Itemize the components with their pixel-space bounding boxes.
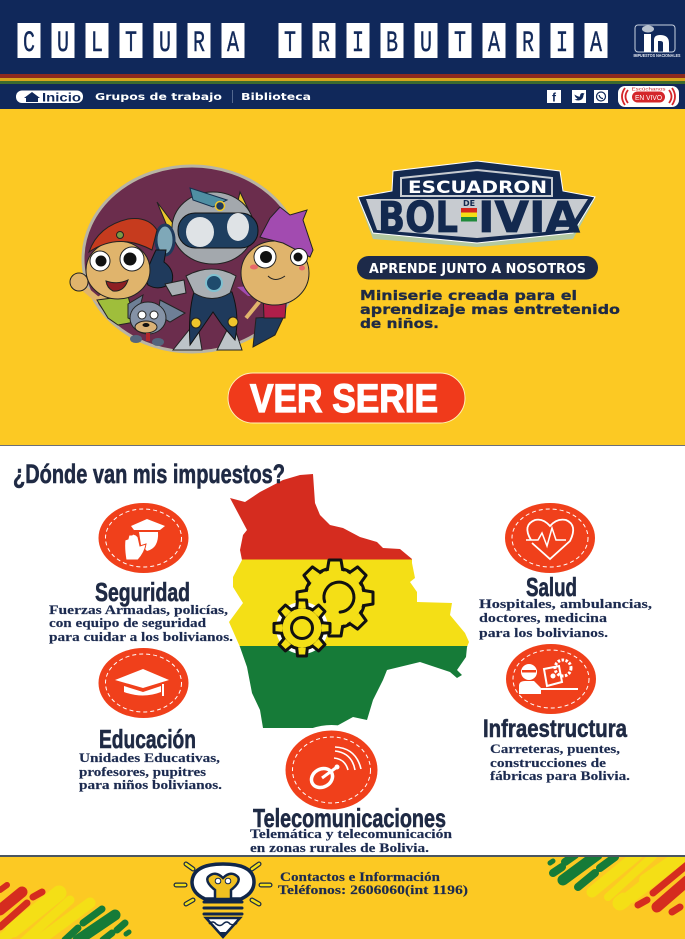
map of Bolivia [229,474,469,728]
title: Cultura Tributaria [18,23,608,61]
icon: whatsapp [594,90,608,103]
label: Infraestructura [483,715,628,743]
description [250,827,452,855]
nav link: Grupos de trabajo: Grupos de trabajo [95,92,222,103]
logo: Escuadrón de Bolivia: BOL [378,193,458,243]
logo: Impuestos Nacionales [634,25,680,58]
footer [0,852,685,939]
nav link: Biblioteca: Biblioteca [241,92,311,103]
description: Hospitales, ambulancias, [479,597,652,611]
description: construcciones de [490,756,607,770]
button: ver serie: VER SERIE [250,377,438,421]
description: Unidades Educativas, [79,751,220,765]
label: Salud [526,572,577,602]
title: Cultura Tributaria: I [556,27,568,61]
description: Carreteras, puentes, [490,742,620,756]
boy [70,218,157,325]
title: Cultura Tributaria: T [284,27,296,61]
description [490,742,630,783]
title: Cultura Tributaria: U [420,27,432,61]
label: Telecomunicaciones [253,803,446,833]
description text: Miniserie creada para el [360,289,577,304]
icon: facebook [547,90,561,104]
decoration: right stripes [550,852,685,912]
logo: Escuadrón de Bolivia: ESCUADRON [408,178,547,198]
dog [128,295,185,346]
icon: facebook: f [552,90,557,104]
title: Cultura Tributaria: T [454,27,466,61]
description: para los bolivianos. [479,626,608,640]
description [479,597,652,640]
description text [360,289,620,332]
label: Educación [99,724,196,754]
contact text [278,870,468,897]
nav button: Inicio [16,90,83,104]
title: Cultura Tributaria: C [23,27,35,61]
description: en zonas rurales de Bolivia. [250,841,429,855]
card: Seguridad [49,503,233,644]
title: Cultura Tributaria: A [590,27,602,61]
icon: light bulb pencil [176,864,270,938]
description: doctores, medicina [479,611,608,625]
description [79,751,222,792]
icon: heart with pulse [505,503,595,573]
title: Cultura Tributaria: L [91,27,103,61]
description: para cuidar a los bolivianos. [49,630,233,644]
description: profesores, pupitres [79,765,206,779]
contact text: Contactos e Información [280,870,440,884]
description [49,603,233,644]
description: con equipo de seguridad [49,616,206,630]
title: Cultura Tributaria: R [193,27,205,61]
badge: escúchanos en vivo: EN VIVO [635,93,662,102]
header band [0,0,685,84]
icon: police cap and hand [98,503,188,573]
icon: twitter [572,90,586,103]
description: para niños bolivianos. [79,778,222,792]
logo: Escuadrón de Bolivia [358,161,595,247]
girl [237,207,313,347]
logo: Escuadrón de Bolivia: DE [463,199,475,208]
card: Telecomunicaciones [250,725,452,855]
heading: donde van mis impuestos: ¿Dónde van mis impuestos? [13,459,285,489]
title: Cultura Tributaria: U [57,27,69,61]
robot [145,188,258,350]
title: Cultura Tributaria: R [522,27,534,61]
decoration: left stripes [0,885,129,939]
tagline pill: APRENDE JUNTO A NOSOTROS [369,262,586,277]
description: fábricas para Bolivia. [490,769,630,783]
panel: Escuadrón de Bolivia [0,109,685,445]
badge: escúchanos en vivo [618,86,679,107]
description text: de niños. [360,317,439,332]
title: Cultura Tributaria: T [125,27,137,61]
nav button: Inicio: Inicio [42,90,81,104]
description text: aprendizaje mas entretenido [360,303,620,318]
title: Cultura Tributaria: R [318,27,330,61]
icon: worker with laptop and gear [506,644,596,714]
icon: gears [274,560,373,656]
card: Infraestructura [483,644,630,783]
panel: donde van mis impuestos [0,445,685,856]
icon: graduation cap [98,648,188,718]
label: Seguridad [95,577,190,607]
title: Cultura Tributaria: I [352,27,364,61]
icon: satellite dish [280,725,384,815]
description: Telemática y telecomunicación [250,827,452,841]
title: Cultura Tributaria: A [227,27,239,61]
title: Cultura Tributaria: A [488,27,500,61]
badge: escúchanos en vivo: Escúchanos [632,86,667,92]
logo: Escuadrón de Bolivia: IVIA [478,193,581,243]
title: Cultura Tributaria: B [386,27,398,61]
title: Cultura Tributaria: U [159,27,171,61]
tagline pill [357,256,598,280]
illustration: series characters [70,166,313,352]
card: Salud [479,503,652,640]
contact text: Teléfonos: 2606060(int 1196) [278,883,468,897]
navigation bar [0,84,685,109]
card: Educación [79,648,222,792]
description: Fuerzas Armadas, policías, [49,603,228,617]
